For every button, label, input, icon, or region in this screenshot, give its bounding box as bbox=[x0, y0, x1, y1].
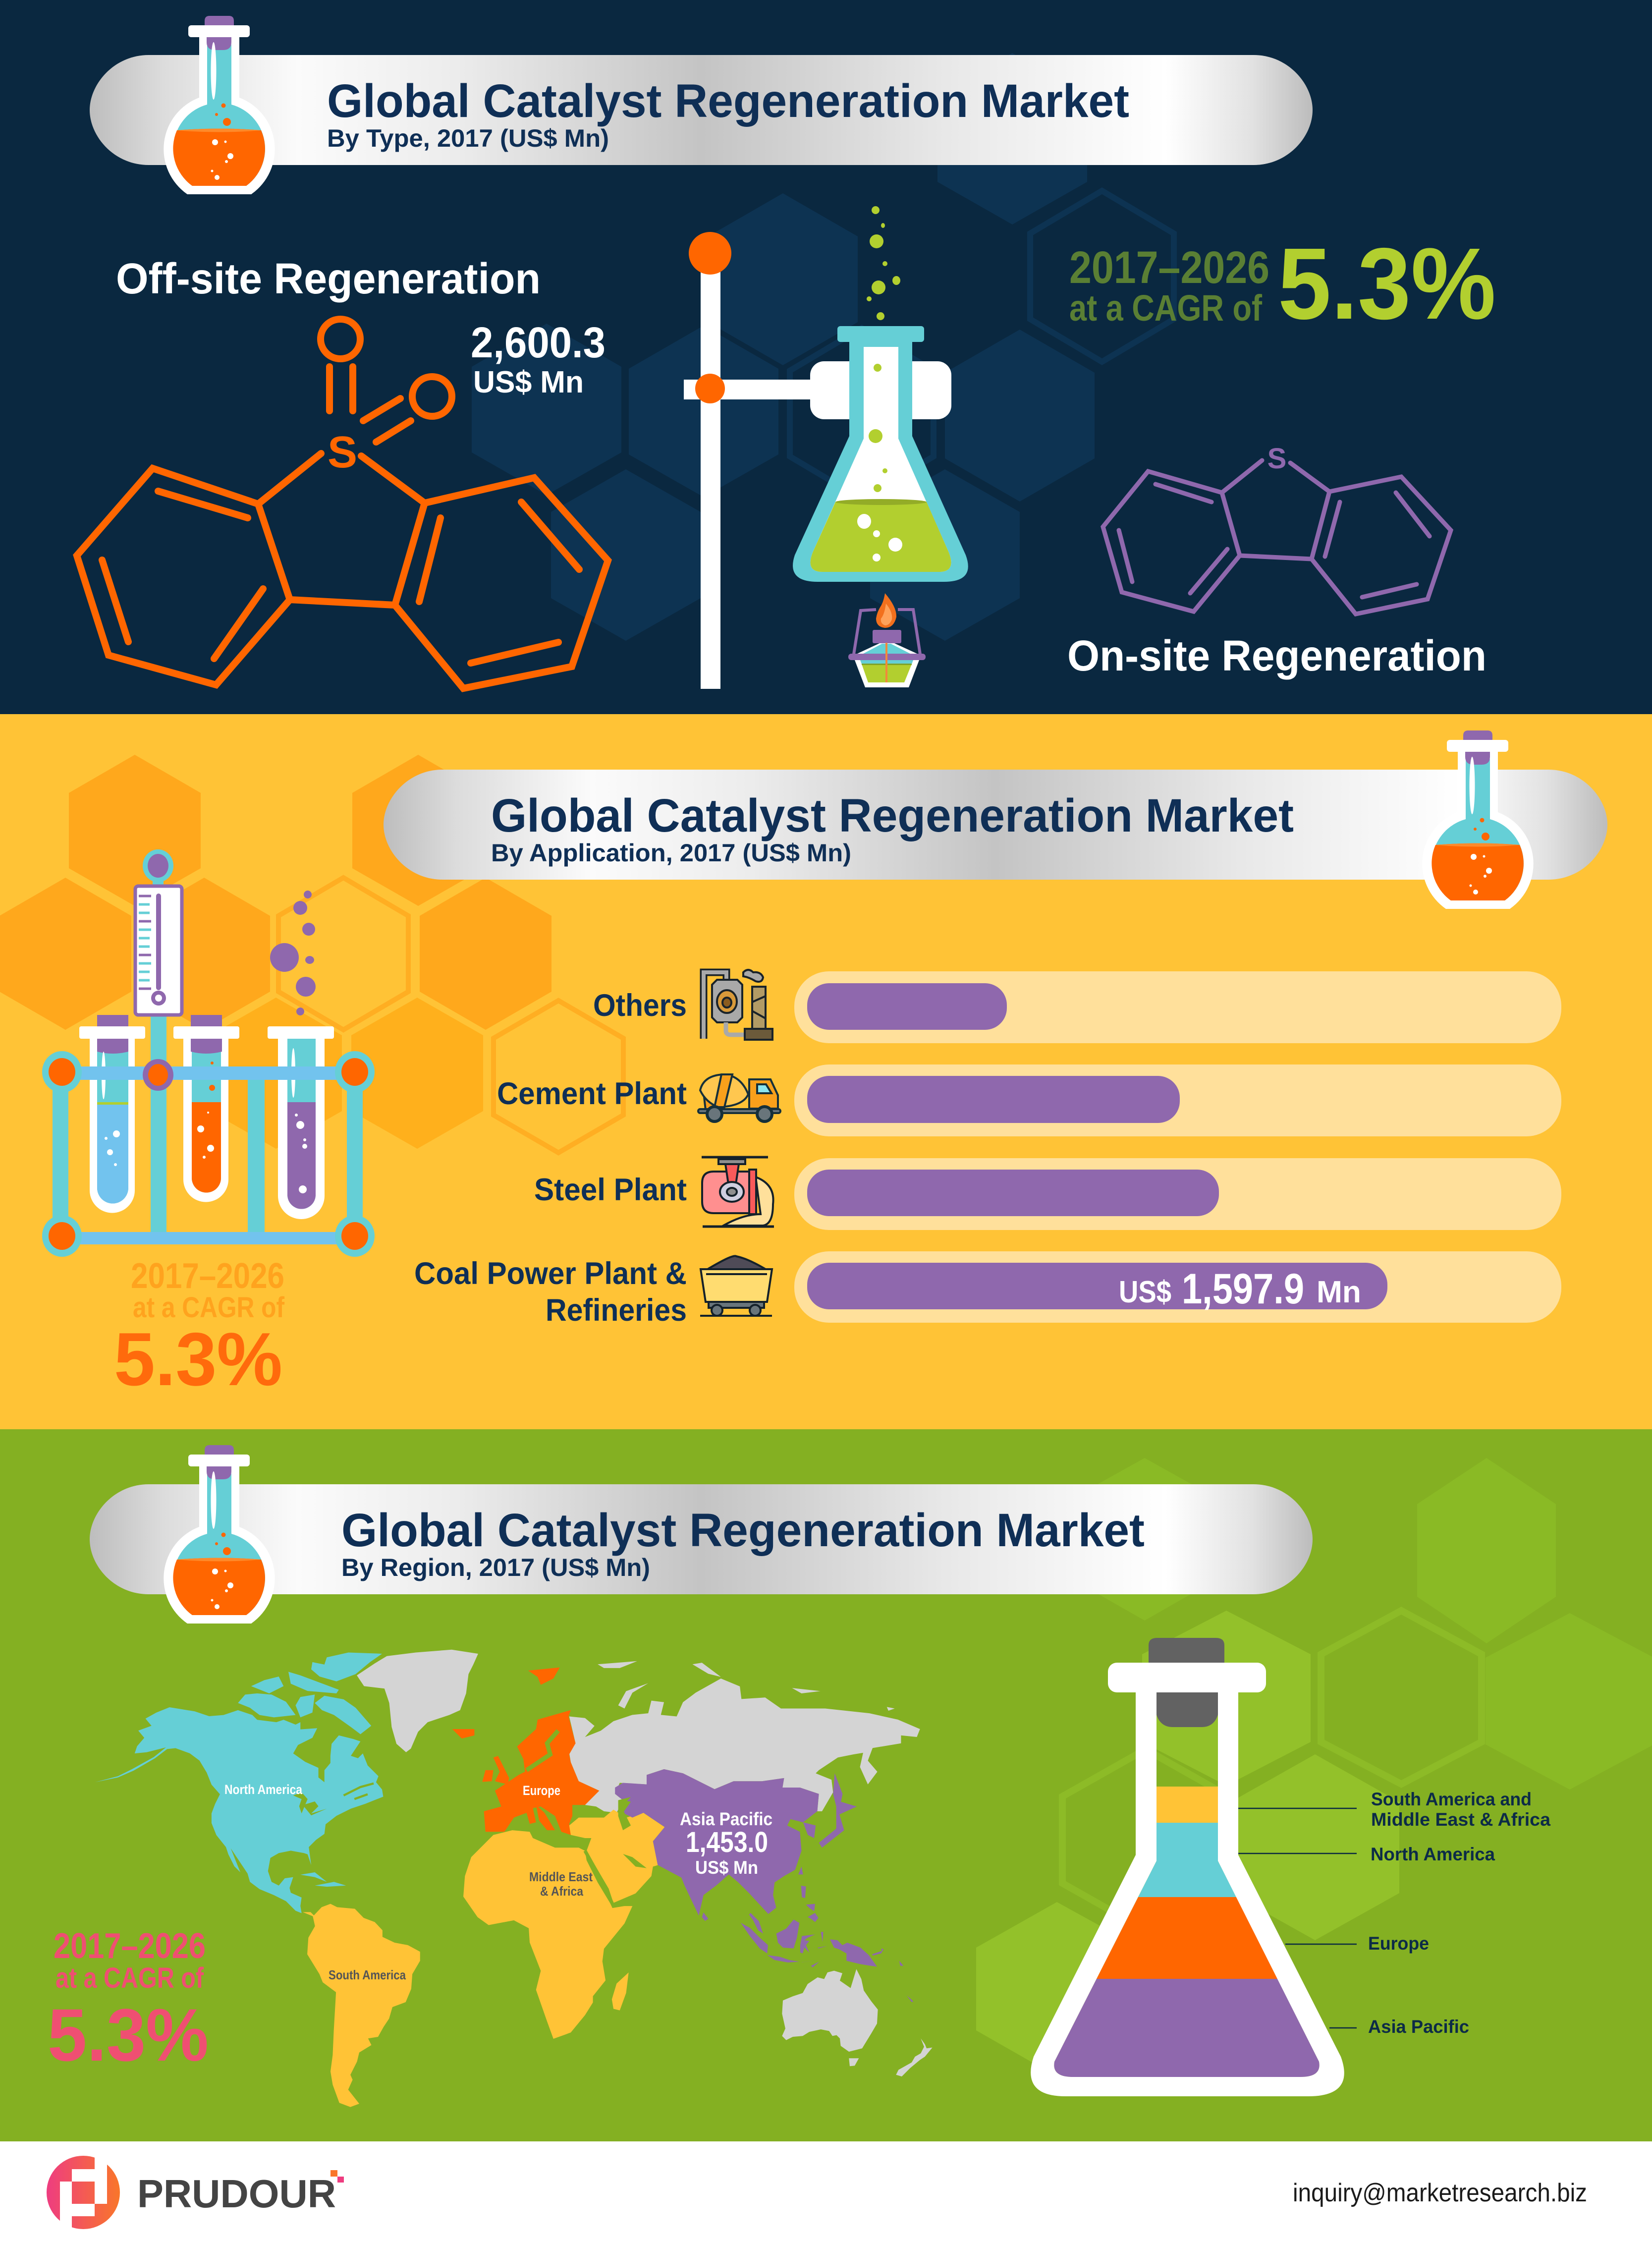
subheading: By Region, 2017 (US$ Mn) bbox=[341, 1554, 650, 1581]
flask legend: Europe bbox=[1368, 1933, 1429, 1954]
map: asia pacific bbox=[615, 1769, 857, 1921]
row: coal power plant and refineries: Coal Power Plant & bbox=[414, 1256, 687, 1291]
cagr callout: 5.3% bbox=[1278, 227, 1496, 340]
tube purple bbox=[268, 1026, 334, 1219]
title banner bbox=[90, 55, 1313, 165]
value: off-site bbox=[471, 319, 606, 399]
world map bbox=[95, 1650, 933, 2107]
logo bbox=[47, 2154, 344, 2230]
row: cement plant: Cement Plant bbox=[497, 1076, 687, 1111]
heading: Global Catalyst Regeneration Market bbox=[327, 75, 1129, 127]
molecule: orange sulfone bbox=[77, 319, 608, 688]
icon: cement truck bbox=[698, 1074, 780, 1121]
erlenmeyer flask bbox=[793, 206, 968, 582]
icon: round flask bbox=[164, 1445, 275, 1624]
map: south america bbox=[303, 1904, 420, 2107]
row: steel plant bbox=[534, 1158, 1561, 1230]
test tube rack bbox=[42, 1015, 375, 1257]
map labels bbox=[224, 1782, 772, 1982]
molecule: orange sulfone: S bbox=[328, 428, 357, 477]
icon: steel machine bbox=[702, 1157, 774, 1227]
row: coal power plant and refineries bbox=[414, 1251, 1561, 1328]
map: southeast asia and oceania bbox=[741, 1886, 933, 2076]
title banner bbox=[90, 1484, 1313, 1594]
logo: PRUDOUR bbox=[137, 2172, 336, 2216]
flask legend: North America bbox=[1371, 1844, 1495, 1864]
row: coal power plant and refineries: Mn bbox=[1317, 1275, 1361, 1309]
value: off-site: US$ Mn bbox=[473, 365, 584, 399]
cagr callout: 5.3% bbox=[48, 1993, 209, 2076]
panel: by type bbox=[0, 0, 1652, 714]
cagr callout: 2017–2026 bbox=[54, 1926, 206, 1966]
map: europe bbox=[452, 1668, 599, 1835]
cagr callout: at a CAGR of bbox=[133, 1291, 285, 1324]
cagr callout: 2017–2026 bbox=[131, 1256, 284, 1296]
cagr callout bbox=[114, 1256, 285, 1401]
icon: coal wagon bbox=[700, 1256, 772, 1316]
heading: Global Catalyst Regeneration Market bbox=[341, 1504, 1145, 1557]
row: coal power plant and refineries: US$ bbox=[1119, 1275, 1171, 1309]
row: cement plant bbox=[497, 1064, 1561, 1136]
row: others bbox=[593, 971, 1561, 1043]
map labels: South America bbox=[329, 1967, 406, 1982]
heading: Global Catalyst Regeneration Market bbox=[491, 789, 1294, 842]
label: on-site regeneration: On-site Regeneration bbox=[1067, 632, 1487, 680]
cagr callout: at a CAGR of bbox=[55, 1962, 204, 1994]
panel: by application bbox=[0, 714, 1652, 1429]
cagr callout bbox=[1069, 227, 1496, 340]
map labels: North America bbox=[224, 1782, 303, 1797]
footer bbox=[0, 2141, 1652, 2241]
icon: refinery bbox=[704, 970, 772, 1040]
cagr callout bbox=[48, 1926, 209, 2076]
molecule: purple thiophene: S bbox=[1267, 443, 1286, 475]
flask chart bbox=[1031, 1638, 1550, 2096]
map labels: Asia Pacific bbox=[680, 1809, 772, 1829]
cagr callout: at a CAGR of bbox=[1069, 287, 1262, 329]
burner bbox=[848, 593, 926, 687]
map labels: Europe bbox=[523, 1783, 560, 1798]
bar chart bbox=[414, 971, 1561, 1328]
subheading: By Type, 2017 (US$ Mn) bbox=[327, 124, 609, 152]
subheading: By Application, 2017 (US$ Mn) bbox=[491, 839, 851, 867]
molecule: purple thiophene bbox=[1103, 443, 1451, 614]
flask legend: South America and bbox=[1371, 1789, 1532, 1809]
lab stand bbox=[684, 232, 951, 689]
flask legend bbox=[1368, 1789, 1550, 2037]
contact email: inquiry@marketresearch.biz bbox=[1293, 2179, 1587, 2207]
tube blue bbox=[79, 1015, 145, 1213]
row: others: Others bbox=[593, 988, 687, 1023]
map labels: & Africa bbox=[540, 1884, 583, 1899]
cagr callout: 5.3% bbox=[114, 1317, 282, 1401]
map: russia bbox=[569, 1661, 920, 1813]
value: off-site: 2,600.3 bbox=[471, 319, 606, 367]
row: coal power plant and refineries: 1,597.9 bbox=[1182, 1265, 1304, 1313]
icon: round flask bbox=[164, 16, 275, 194]
title banner bbox=[384, 770, 1607, 880]
map labels: 1,453.0 bbox=[686, 1826, 768, 1858]
bubbles bbox=[270, 891, 316, 1015]
map: middle east and africa bbox=[463, 1810, 664, 2039]
row: steel plant: Steel Plant bbox=[534, 1173, 687, 1207]
thermometer bbox=[135, 849, 182, 1015]
label: off-site regeneration: Off-site Regeneration bbox=[116, 255, 541, 303]
flask legend: Middle East & Africa bbox=[1371, 1809, 1550, 1830]
map labels: US$ Mn bbox=[695, 1857, 758, 1878]
map: eurasia and africa bbox=[452, 1661, 920, 2039]
cagr callout: 2017–2026 bbox=[1069, 242, 1269, 293]
icon: round flask bbox=[1422, 730, 1534, 909]
map labels: Middle East bbox=[529, 1869, 593, 1884]
map: north america and greenland bbox=[95, 1650, 478, 1913]
row: coal power plant and refineries: Refineries bbox=[546, 1293, 687, 1328]
panel: by region bbox=[0, 1429, 1652, 2141]
flask legend: Asia Pacific bbox=[1368, 2017, 1469, 2037]
tube orange bbox=[173, 1015, 239, 1202]
